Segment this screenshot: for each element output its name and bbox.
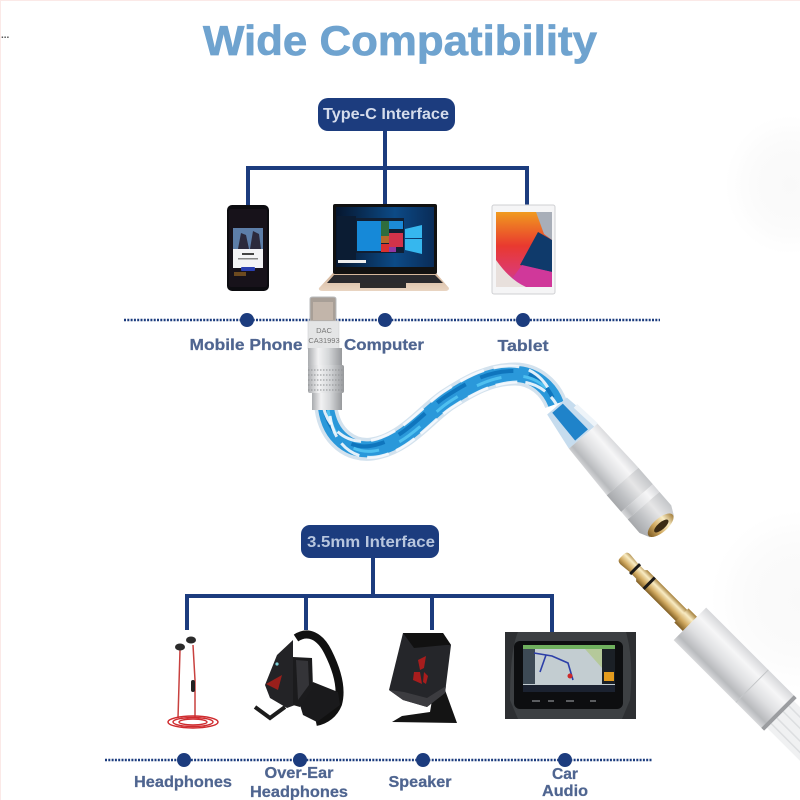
icon: laptop computer bbox=[319, 204, 449, 291]
label: Headphones: Headphones bbox=[134, 774, 232, 791]
icon: mobile phone bbox=[227, 205, 269, 291]
label: Mobile Phone: Mobile Phone bbox=[190, 337, 303, 354]
dotted timeline bbox=[105, 759, 652, 761]
node: headphones bbox=[177, 753, 191, 767]
label: Car Audio: Car bbox=[552, 766, 578, 783]
node: car audio bbox=[558, 753, 572, 767]
dotted timeline bbox=[124, 319, 660, 321]
label: Tablet: Tablet bbox=[498, 338, 549, 355]
panel: Type-C devices bbox=[124, 98, 660, 355]
heading: Type-C Interface: Type-C Interface bbox=[323, 106, 449, 123]
node: speaker bbox=[416, 753, 430, 767]
heading: 3.5mm Interface bbox=[301, 525, 439, 558]
node: mobile phone bbox=[240, 313, 254, 327]
connector lines bbox=[248, 130, 527, 205]
label: Over-Ear Headphones: Over-Ear bbox=[264, 765, 334, 782]
engraved text: DAC bbox=[316, 326, 332, 335]
node: computer bbox=[378, 313, 392, 327]
title: Wide Compatibility bbox=[203, 17, 598, 64]
icon: speaker bbox=[389, 633, 457, 723]
heading: Type-C Interface bbox=[318, 98, 455, 131]
icon: car audio bbox=[505, 632, 636, 719]
label: Over-Ear Headphones bbox=[250, 765, 348, 800]
adapter: USB-C plug: CA31993 bbox=[308, 336, 340, 345]
page marker dots: ... bbox=[1, 30, 10, 41]
icon: 3.5mm jack plug bbox=[606, 540, 800, 766]
label: Computer: Computer bbox=[344, 337, 424, 354]
icon: earphones bbox=[168, 636, 218, 728]
panel: 3.5mm devices bbox=[105, 525, 652, 800]
node: tablet bbox=[516, 313, 530, 327]
label: Car Audio bbox=[542, 766, 588, 800]
adapter: braided cable bbox=[322, 366, 560, 457]
label: Speaker: Speaker bbox=[388, 774, 452, 791]
label: Car Audio: Audio bbox=[542, 783, 588, 800]
icon: over-ear headset bbox=[255, 634, 340, 722]
node: over-ear headphones bbox=[293, 753, 307, 767]
heading: 3.5mm Interface: 3.5mm Interface bbox=[307, 534, 435, 551]
adapter: USB-C plug bbox=[308, 297, 344, 410]
adapter: 3.5mm socket bbox=[541, 392, 681, 544]
connector lines bbox=[187, 557, 552, 632]
icon: tablet bbox=[492, 205, 555, 294]
